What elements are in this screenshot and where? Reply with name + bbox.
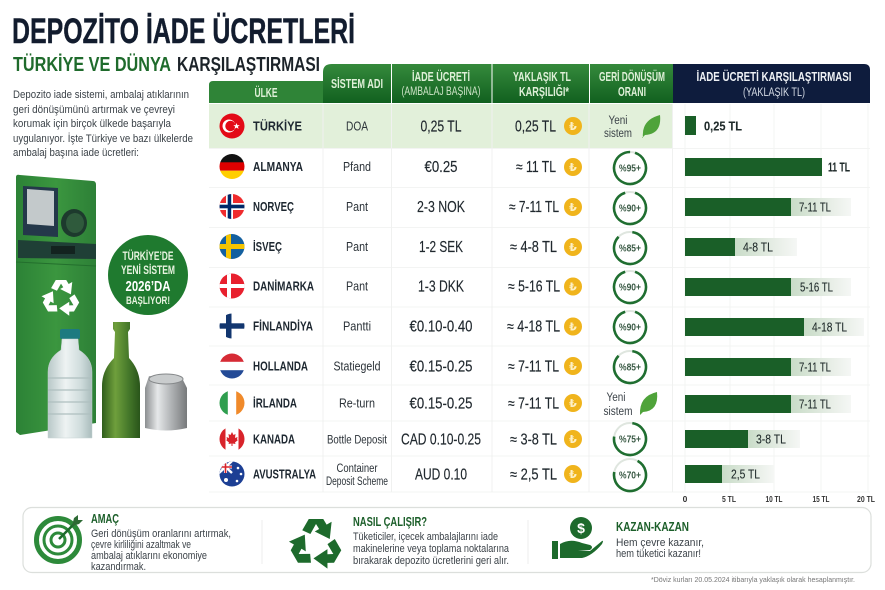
text: nasıl çalışır: Tüketiciler, içecek ambalajlarını iade (353, 531, 498, 543)
row: Norveç: ≈ 7-11 TL (509, 199, 559, 216)
intro text: geri dönüşümünü artırmak ve çevreyi (13, 104, 175, 116)
row: İsveç: 4-8 TL (743, 240, 773, 254)
row: Kanada: CAD 0.10-0.25 (401, 432, 481, 448)
row: Türkiye: sistem (604, 128, 632, 140)
badge: 2026: TÜRKİYE’DE (122, 250, 174, 263)
row: İrlanda: İRLANDA (253, 396, 297, 410)
text: amaç: kazandırmak. (91, 561, 146, 573)
table header: GERİ DÖNÜŞÜM (599, 69, 665, 84)
row: Hollanda: Statiegeld (334, 360, 381, 374)
row: Danimarka: %90+ (619, 282, 641, 294)
row: Finlandiya: 4-18 TL (812, 320, 847, 334)
text: amaç: çevre kirliliğini azaltmak ve (91, 539, 191, 551)
row: Norveç: Pant (346, 200, 368, 214)
row: Norveç (220, 191, 851, 226)
row: Kanada: KANADA (253, 432, 295, 446)
table header: ORANI (618, 85, 646, 99)
row: Avustralya: AVUSTRALYA (253, 468, 316, 482)
row: Hollanda: HOLLANDA (253, 360, 308, 374)
row: Finlandiya: ≈ 4-18 TL (507, 318, 560, 336)
intro text (13, 89, 193, 159)
row: İsveç: Pant (346, 240, 368, 254)
row: Danimarka: ≈ 5-16 TL (508, 278, 560, 296)
icon: recycle (287, 519, 345, 570)
badge: 2026 (108, 235, 188, 315)
row: Avustralya (220, 458, 774, 492)
row: Finlandiya: %90+ (619, 322, 641, 334)
row: Kanada: ₺ (569, 433, 577, 446)
row: Türkiye: ₺ (569, 120, 577, 133)
table header: SİSTEM ADI (331, 76, 383, 91)
row: Danimarka: ₺ (569, 280, 577, 294)
table header: ÜLKE (254, 85, 278, 100)
row: Almanya: €0.25 (424, 159, 458, 176)
intro text: uygulanıyor. İşte Türkiye ve bazı ülkelerde (13, 132, 193, 145)
row: İrlanda: €0.15-0.25 (410, 396, 472, 412)
row: İsveç (219, 229, 797, 267)
row: Türkiye: Yeni (608, 115, 628, 127)
row: Türkiye: DOA (346, 120, 369, 134)
text: kazan-kazan: Hem çevre kazanır, (616, 537, 704, 549)
icon: hand with coin: $ (577, 520, 585, 536)
text: nasıl çalışır: makinelerine veya toplama noktalarına (353, 543, 510, 555)
chart axis labels: 20 TL (857, 494, 875, 504)
row: Almanya: ALMANYA (253, 160, 303, 174)
row: Almanya: Pfand (343, 160, 371, 174)
row: İrlanda: Yeni (606, 392, 626, 404)
row: Hollanda (219, 348, 851, 386)
row: Kanada: 3-8 TL (756, 432, 786, 446)
row: İsveç: %85+ (619, 242, 641, 254)
text: kazan-kazan (616, 520, 704, 560)
row: Türkiye: 0,25 TL (515, 118, 556, 136)
icon: hand with coin (552, 517, 603, 559)
table header: İADE ÜCRETİ (412, 69, 470, 84)
row: İrlanda: ≈ 7-11 TL (508, 396, 559, 412)
row: İrlanda: Re-turn (339, 396, 375, 410)
row: Almanya: ₺ (569, 161, 577, 174)
chart header (673, 64, 870, 103)
chart axis labels: 0 (683, 494, 688, 504)
row: Avustralya: Deposit Scheme (326, 476, 388, 488)
row: Hollanda: 7-11 TL (799, 360, 831, 374)
table header: (AMBALAJ BAŞINA) (402, 86, 481, 98)
text: kazan-kazan: hem tüketici kazanır! (616, 548, 701, 560)
row: Norveç: 2-3 NOK (417, 199, 466, 216)
row: Danimarka: Pant (346, 280, 368, 294)
row: Finlandiya: Pantti (343, 320, 371, 334)
badge: 2026: 2026’DA (126, 278, 171, 295)
row: Hollanda: ₺ (569, 360, 577, 373)
row: Norveç: 7-11 TL (799, 200, 831, 214)
badge: 2026: BAŞLIYOR! (126, 295, 170, 307)
panel: bottom info (23, 508, 871, 573)
row: İrlanda: ₺ (569, 397, 577, 410)
chart header: (YAKLAŞIK TL) (743, 87, 805, 99)
intro text: korumak için birçok ülkede başarıyla (13, 118, 172, 130)
row: Türkiye: TÜRKİYE (253, 118, 302, 134)
subtitle: KARŞILAŞTIRMASI (177, 54, 320, 76)
text: amaç: Geri dönüşüm oranlarını artırmak, (91, 528, 231, 540)
row: İrlanda: 7-11 TL (799, 398, 831, 412)
chart axis labels: 15 TL (812, 494, 830, 504)
text: amaç (91, 512, 231, 573)
text: nasıl çalışır: bırakarak depozito ücretlerini geri alır. (353, 555, 509, 567)
table header: YAKLAŞIK TL (513, 70, 571, 84)
row: Hollanda: ≈ 7-11 TL (508, 358, 559, 376)
row: Türkiye: 0,25 TL (420, 118, 462, 136)
row: İsveç: 1-2 SEK (419, 239, 463, 256)
text: amaç: ambalaj atıklarını ekonomiye (91, 550, 207, 562)
row: Finlandiya: ₺ (569, 320, 577, 334)
row: İsveç: ≈ 4-8 TL (510, 239, 557, 256)
text: nasıl çalışır (353, 515, 510, 567)
row: Avustralya: AUD 0.10 (415, 466, 467, 484)
row: Kanada (219, 420, 800, 458)
row: İrlanda: sistem (604, 406, 632, 418)
row: Türkiye: 0,25 TL (704, 120, 742, 134)
row: Türkiye (219, 113, 742, 140)
row: Avustralya: 2,5 TL (731, 468, 760, 482)
text: amaç: AMAÇ (91, 512, 119, 526)
row: Norveç: %90+ (619, 202, 641, 214)
row: Finlandiya: €0.10-0.40 (410, 318, 473, 336)
row: Avustralya: ≈ 2,5 TL (510, 466, 557, 484)
intro text: ambalaj başına iade ücretleri: (13, 147, 139, 159)
row: Danimarka: 5-16 TL (800, 280, 833, 294)
row: İsveç: İSVEÇ (253, 239, 282, 254)
badge: 2026: YENİ SİSTEM (121, 264, 175, 277)
text: nasıl çalışır: NASIL ÇALIŞIR? (353, 515, 427, 529)
row: Almanya: ≈ 11 TL (516, 159, 556, 176)
row: Hollanda: %85+ (619, 362, 641, 374)
chart axis labels (683, 494, 875, 504)
row: Avustralya: Container (336, 463, 378, 475)
row: Danimarka: 1-3 DKK (418, 278, 465, 296)
subtitle (13, 53, 320, 76)
row: Avustralya: ₺ (569, 468, 577, 481)
row: Almanya (220, 150, 850, 186)
row: Norveç: NORVEÇ (253, 200, 294, 214)
title: DEPOZİTO İADE ÜCRETLERİ (12, 12, 355, 51)
text: kazan-kazan: KAZAN-KAZAN (616, 520, 689, 534)
illustration: reverse vending machine (16, 175, 96, 435)
row: İsveç: ₺ (569, 241, 577, 254)
chart axis labels: 5 TL (722, 494, 736, 504)
chart axis labels: 10 TL (766, 494, 782, 504)
row: Almanya: %95+ (619, 162, 641, 174)
icon: target (36, 515, 83, 562)
row: Hollanda: €0.15-0.25 (410, 358, 472, 376)
row: Almanya: 11 TL (828, 160, 850, 174)
row: Kanada: Bottle Deposit (327, 434, 388, 446)
row: Danimarka: DANİMARKA (253, 278, 314, 294)
table header (209, 64, 673, 103)
row: Finlandiya (220, 310, 864, 344)
row: Kanada: %75+ (619, 434, 641, 446)
illustration: glass bottle (102, 322, 140, 438)
table rows background (209, 104, 870, 492)
subtitle: TÜRKİYE VE DÜNYA (13, 53, 171, 76)
row: İrlanda (220, 391, 851, 415)
table header: KARŞILIĞI* (519, 84, 569, 99)
row: Finlandiya: FİNLANDİYA (253, 318, 313, 334)
row: Avustralya: %70+ (619, 470, 641, 482)
row: Norveç: ₺ (569, 201, 577, 214)
footnote: *Döviz kurları 20.05.2024 itibarıyla yaklaşık olarak hesaplanmıştır. (651, 575, 855, 584)
intro text: Depozito iade sistemi, ambalaj atıklarının (13, 89, 189, 101)
illustration: plastic bottle (48, 329, 92, 438)
row: Danimarka (220, 270, 851, 304)
illustration: aluminium can (145, 374, 187, 430)
row: Kanada: ≈ 3-8 TL (510, 432, 557, 448)
